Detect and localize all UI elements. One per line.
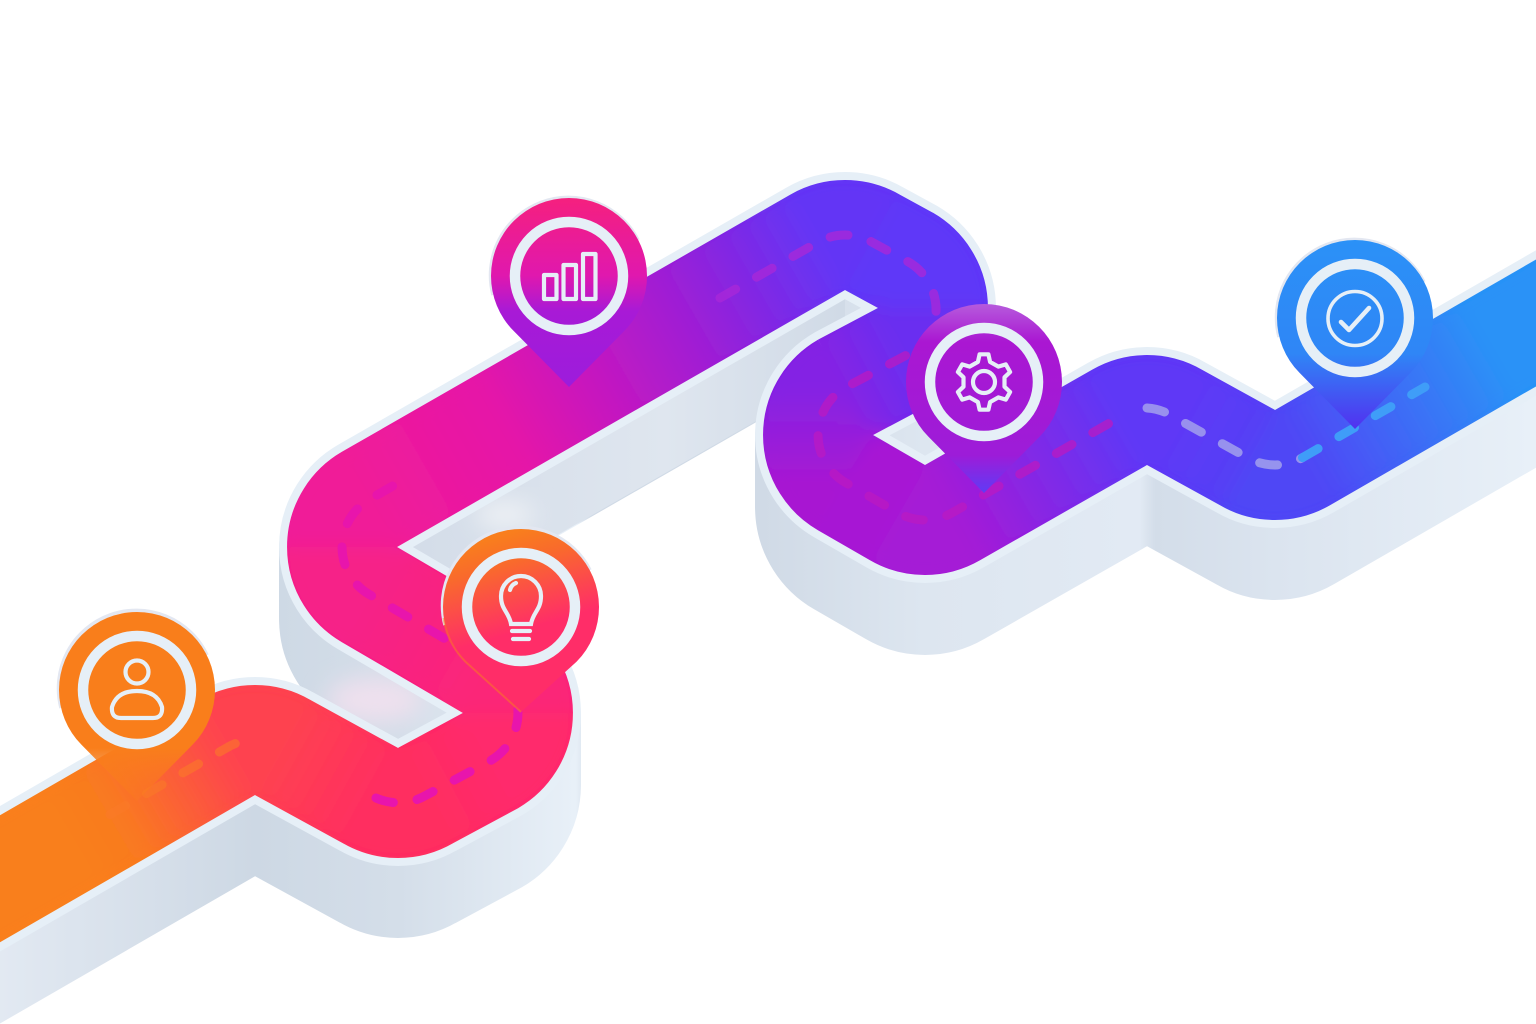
pin 5: check — [1276, 239, 1433, 429]
wall highlight: lower notch — [327, 678, 423, 722]
icon: user — [112, 660, 162, 718]
road surface — [0, 235, 1536, 936]
pin 4: settings — [906, 304, 1062, 493]
pin 2: idea — [442, 527, 599, 712]
pin 1: user — [58, 610, 215, 801]
road side wall — [0, 239, 1536, 1008]
icon: light bulb — [501, 576, 541, 639]
dashed centre line — [110, 235, 1425, 814]
pin 3: bar chart — [490, 197, 647, 387]
icon: bars — [544, 254, 596, 299]
wall highlight: upper notch — [475, 501, 535, 529]
inner wall under upper road — [397, 290, 845, 627]
icon: gear — [958, 354, 1010, 410]
road light border — [0, 235, 1536, 936]
icon: check circle — [1328, 292, 1382, 346]
